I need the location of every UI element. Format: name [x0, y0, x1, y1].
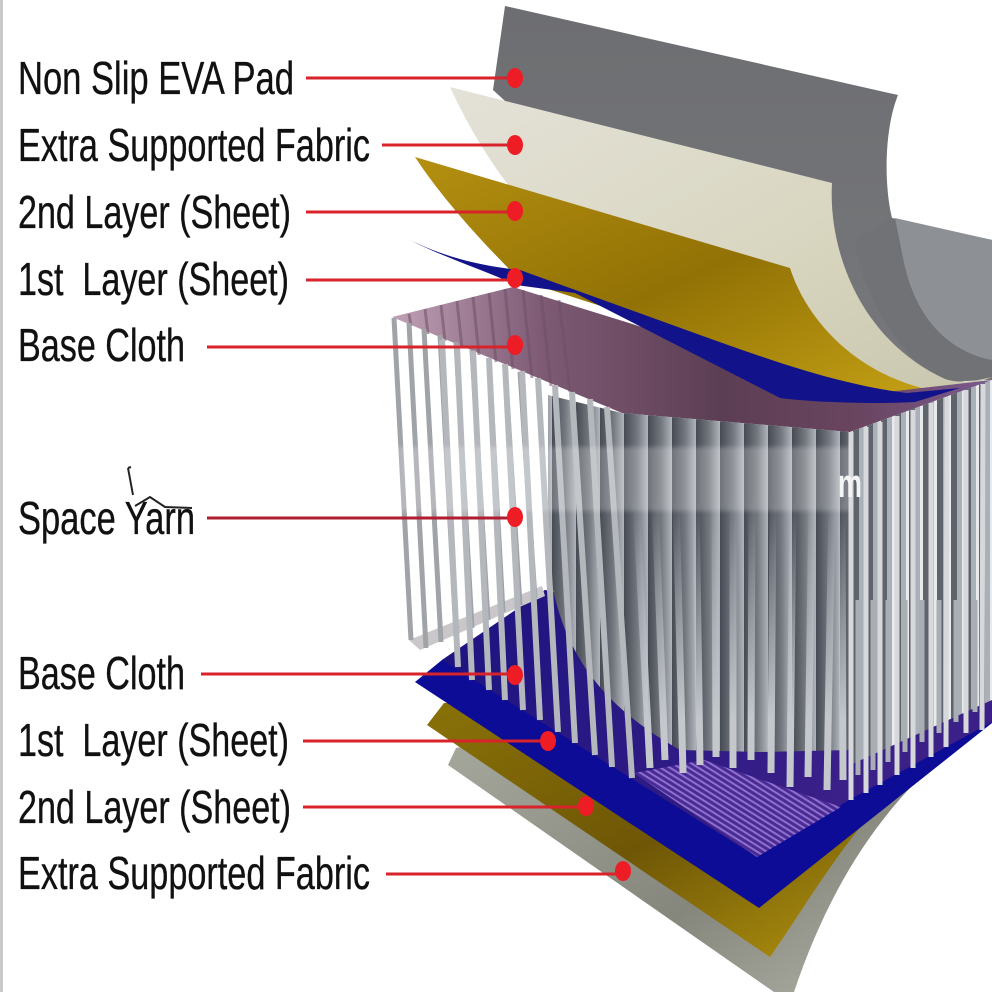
top layer: extra supported fabric	[450, 87, 992, 390]
bottom layer: 1st layer sheet	[415, 590, 992, 908]
yarn: front right rows	[851, 384, 983, 800]
ridged purple weave	[634, 760, 841, 857]
yarn: rear left rows	[394, 318, 535, 648]
label: lower base cloth: Base Cloth	[18, 647, 185, 699]
yarn: front left rows	[442, 340, 632, 778]
labels	[18, 52, 370, 899]
space yarn	[394, 318, 992, 800]
label: extra supported fabric: Extra Supported Fabric	[18, 119, 370, 171]
top base cloth with yarn tops	[392, 287, 992, 432]
leader: base cloth	[207, 335, 523, 355]
label: non slip EVA pad: Non Slip EVA Pad	[18, 52, 294, 104]
leader: 2nd layer sheet	[306, 201, 523, 221]
label: lower 1st layer sheet: 1st Layer (Sheet)	[18, 714, 289, 766]
leader: lower 2nd layer sheet	[303, 796, 594, 816]
leader: lower 1st layer sheet	[303, 731, 556, 751]
lower base cloth floor	[442, 590, 992, 857]
leader: 1st layer sheet	[306, 268, 523, 288]
yarn backing right	[850, 380, 992, 765]
label lines and markers	[201, 68, 631, 881]
yarn shading through the base cloth	[409, 289, 570, 392]
leader: extra supported fabric	[382, 135, 523, 155]
yarn: inner rows	[636, 500, 843, 790]
label: 2nd layer sheet: 2nd Layer (Sheet)	[18, 186, 291, 238]
left edge strip	[0, 0, 3, 992]
bottom layer: 2nd layer sheet	[427, 700, 927, 957]
label: lower 2nd layer sheet: 2nd Layer (Sheet)	[18, 781, 291, 833]
label: lower extra supported fabric: Extra Supported Fabric	[18, 847, 370, 899]
label: base cloth: Base Cloth	[18, 319, 185, 371]
stray pen mark on label	[128, 467, 192, 508]
stray glyph on yarn: m	[838, 462, 862, 506]
leader: space yarn	[207, 507, 523, 527]
blurred yarn band	[398, 447, 850, 511]
top layer: 1st layer sheet	[395, 232, 960, 403]
leader: lower extra supported fabric	[386, 861, 631, 881]
top layer: non slip EVA pad	[493, 6, 992, 385]
label: 1st layer sheet: 1st Layer (Sheet)	[18, 253, 289, 305]
leader: lower base cloth	[201, 665, 523, 685]
label: space yarn: Space Yarn	[18, 492, 195, 544]
back floor band	[409, 586, 545, 650]
yarn backing column	[548, 395, 850, 752]
bottom layer: extra supported fabric	[448, 700, 942, 992]
top layer: 2nd layer sheet	[415, 157, 966, 398]
leader: non slip EVA pad	[306, 68, 523, 88]
yarn: right inner rows	[858, 600, 975, 775]
